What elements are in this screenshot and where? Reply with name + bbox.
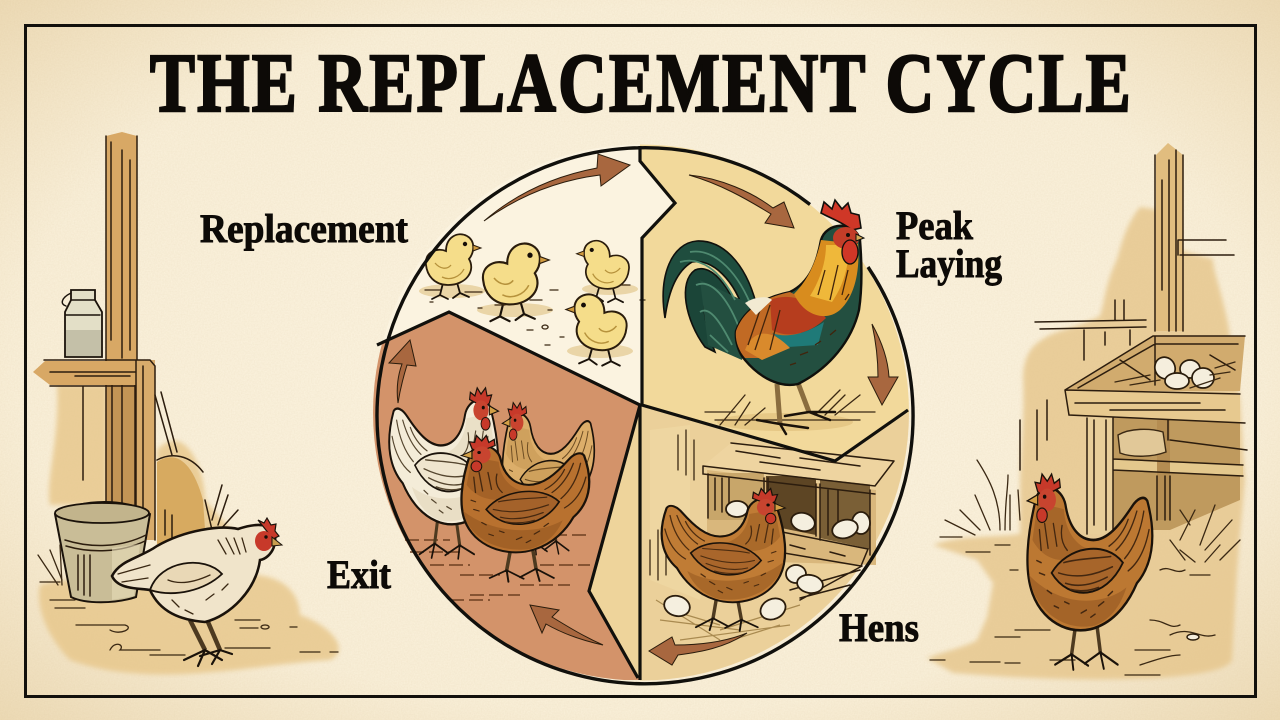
label: exit: Exit [327,552,392,597]
exit hens [389,388,594,600]
body [736,226,861,385]
haystack and rake [155,392,238,544]
wooden post [1020,143,1234,470]
cycle wheel [365,140,915,690]
right barn scene [927,143,1247,679]
icon: glass jar [62,290,102,357]
icon: eggs [662,501,870,624]
nesting box illustration [650,425,894,650]
tail feathers [663,241,756,318]
panel: hens segment [640,405,915,690]
brown hen standing [1027,474,1152,670]
white hen pecking [112,518,282,666]
grass tufts [940,460,1240,570]
label: peak laying [896,203,1002,286]
label: peak laying: Laying [896,241,1002,286]
icon: eggs in straw [1151,354,1214,389]
white hen [389,388,498,559]
brown hen at nest [662,488,785,631]
label: hens: Hens [839,605,919,650]
panel: peak laying segment [640,140,915,461]
brown hen [461,436,589,582]
wash: wall and ground [927,207,1245,679]
left barn scene [33,132,339,675]
segment fills [365,140,915,690]
shelf [33,360,155,540]
label: peak laying: Peak [896,203,974,248]
grass and ground marks [38,545,338,655]
chicks and feed [419,234,645,366]
legs [777,383,809,424]
wooden post [106,132,137,510]
panel: exit segment [365,312,640,680]
chick 3 [577,241,629,302]
arrow: peak laying to hens [868,324,898,405]
tan hen [502,403,594,555]
burlap sack [1118,429,1166,456]
nesting tray [1065,336,1247,534]
panel: strip beside exit [590,417,638,676]
arrow: replacement to peak laying [484,154,630,221]
arrow: exit to replacement [389,340,416,403]
icon: metal bucket [55,502,150,602]
comb and head [821,200,861,230]
chick 4 [566,294,627,366]
label: replacement: Replacement [200,206,409,251]
rooster [663,200,875,434]
wheel outline [377,148,913,684]
segment dividers [377,146,908,680]
arrow: exit leftward [530,605,603,645]
chick 1 [426,234,481,299]
arrow: hens to exit [649,633,747,665]
wash: ground and wall [39,385,339,675]
ground marks [930,569,1215,675]
arrow: peak laying downward [689,175,794,228]
chick 2 [483,244,549,321]
